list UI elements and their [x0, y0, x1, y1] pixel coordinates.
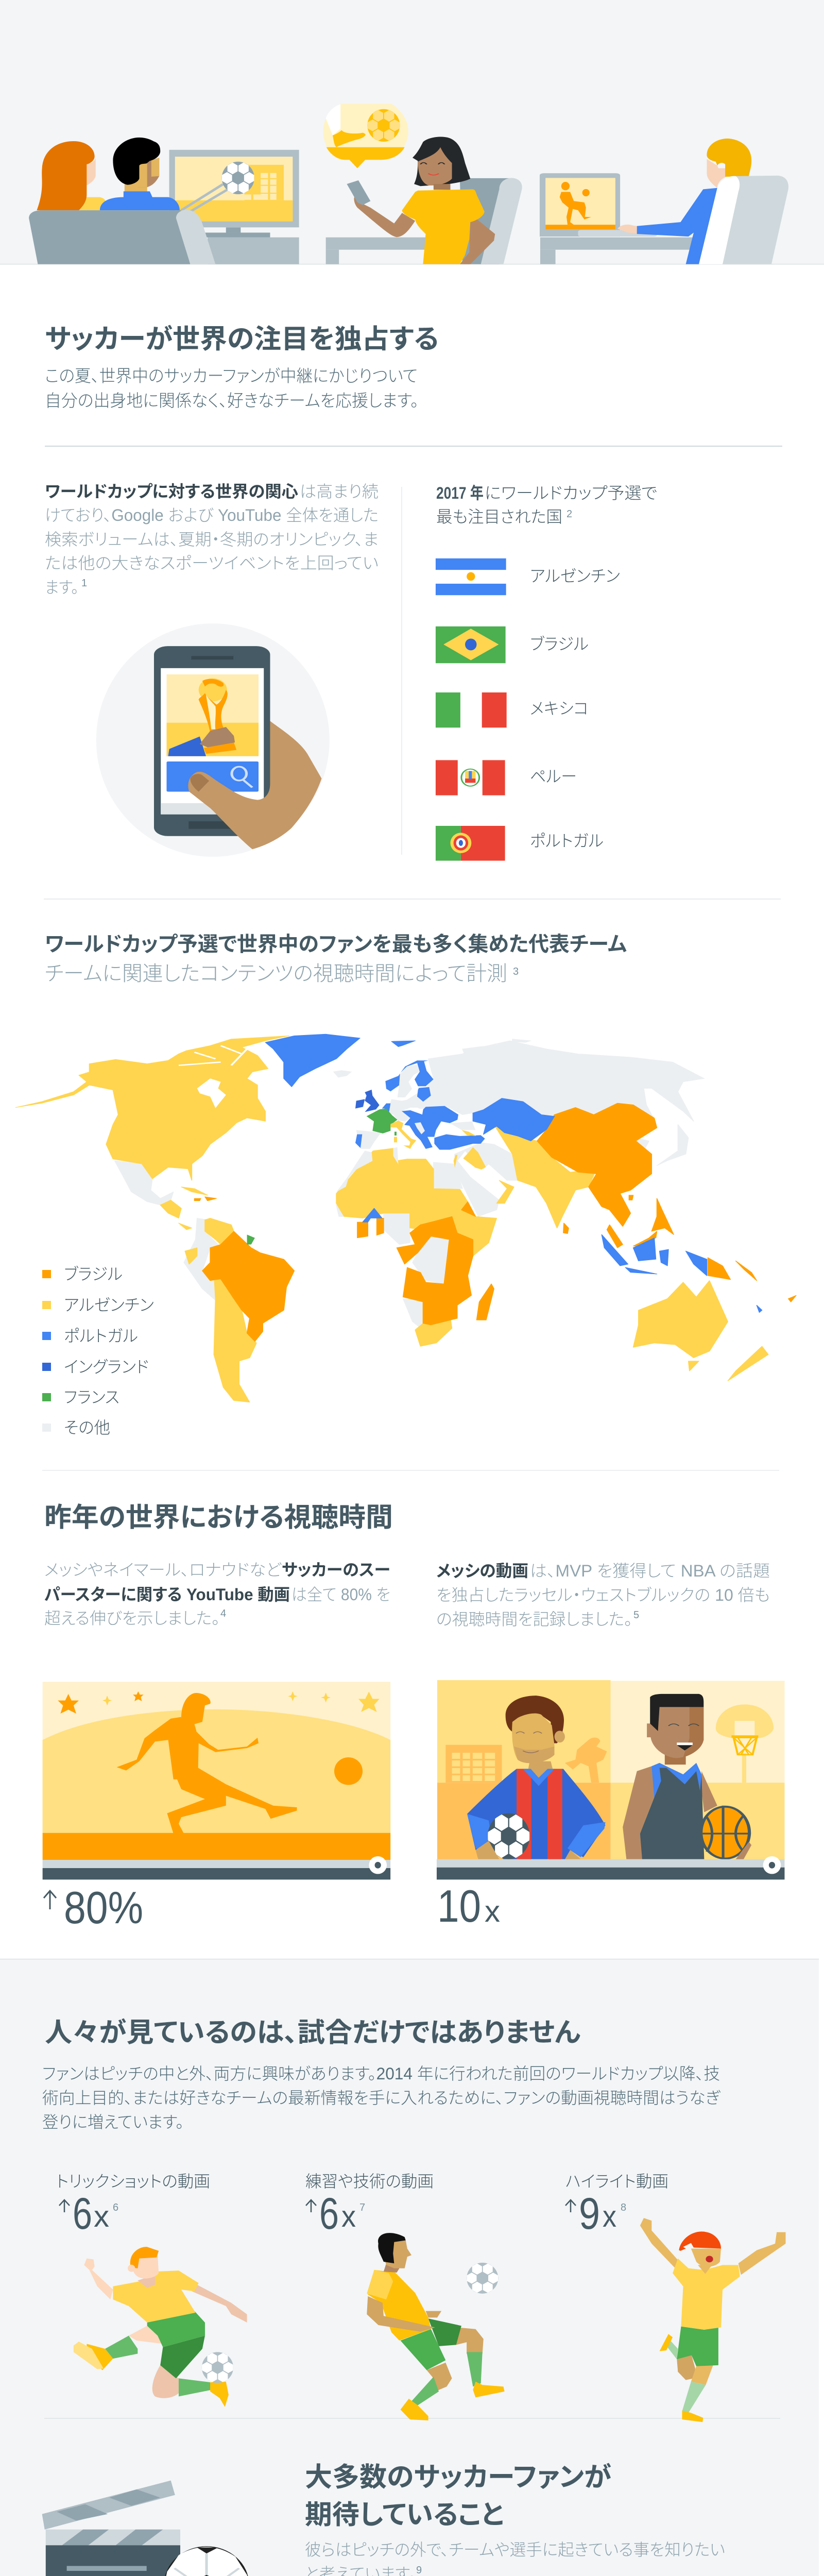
map legend: アルゼンチン [64, 1296, 154, 1314]
world map [16, 1034, 796, 1402]
player in basketball tank [623, 1694, 751, 1859]
stat: 10x: x [485, 1895, 500, 1928]
search interest text [45, 482, 379, 597]
player one kicking [74, 2247, 247, 2407]
map legend: その他 [64, 1418, 110, 1437]
region: other countries [114, 1039, 704, 1330]
heading: not only matches: 人々が見ているのは、試合だけではありません [45, 2018, 580, 2048]
text: what fans expect: 9 [416, 2565, 422, 2576]
label: Brazil: ブラジル [530, 635, 589, 653]
flag: Brazil [436, 626, 506, 663]
player three cheering [640, 2218, 785, 2422]
heading: most searched countries: 2 [566, 509, 572, 520]
flag: Peru [436, 760, 505, 795]
map legend: イングランド [64, 1358, 149, 1376]
text: superstars: メッシやネイマール、ロナウドなど [44, 1561, 282, 1579]
region: French Guiana [247, 1234, 255, 1244]
label: Mexico: メキシコ [530, 699, 589, 718]
stat: highlights 9x: x [603, 2200, 616, 2233]
intro text: 自分の出身地に関係なく、好きなチームを応援します。 [45, 391, 419, 410]
text: what fans expect: 彼らはピッチの外で、チームや選手に起きている事を知りたい [305, 2540, 725, 2559]
stat: trick shots 6x: 6 [73, 2189, 92, 2239]
illustration: soccer player silhouette video [43, 1682, 390, 1879]
text: Messi: の視聴時間を記録しました。 [436, 1610, 632, 1629]
woman with phone [326, 137, 522, 264]
flag: Portugal [436, 826, 505, 861]
search interest text: 検索ボリュームは、夏期・冬期のオリンピック、ま [45, 530, 379, 549]
map legend: フランス [64, 1388, 119, 1406]
heading: most searched countries: 2017 年 [436, 484, 484, 502]
stat: practice 6x: 練習や技術の動画 [305, 2172, 434, 2191]
text: superstars: サッカーのスー [282, 1561, 390, 1579]
player two juggling [367, 2233, 505, 2420]
label: Argentina: アルゼンチン [530, 567, 620, 585]
illustration: Messi and Westbrook video [437, 1680, 784, 1879]
heading: most searched countries [436, 484, 657, 526]
search interest text: は高まり続 [300, 482, 379, 501]
icon: clapperboard and ball [34, 2481, 254, 2576]
text: Messi: は、MVP を獲得して NBA の話題 [530, 1562, 770, 1580]
label: Portugal: ポルトガル [530, 832, 604, 850]
heading: most searched countries: 最も注目された国 [436, 507, 562, 526]
stat: up 80%: 80% [64, 1882, 143, 1933]
text: Messi: メッシの動画 [436, 1562, 528, 1580]
heading: viewing time: 昨年の世界における視聴時間 [44, 1503, 393, 1533]
text: fans interest: 術向上目的、または好きなチームの最新情報を手に入れるために、ファンの動画視聴時間はうなぎ [42, 2089, 721, 2107]
flag: Mexico [436, 692, 507, 727]
stat: trick shots 6x: 6 [113, 2202, 118, 2213]
stat: practice 6x: x [341, 2200, 356, 2233]
player in soccer jersey [467, 1696, 606, 1859]
stat: practice 6x: 6 [319, 2189, 339, 2239]
heading: what fans expect [305, 2463, 611, 2530]
man at laptop [540, 139, 788, 264]
stat: practice 6x [305, 2172, 434, 2239]
intro text: この夏、世界中のサッカーファンが中継にかじりついて [45, 366, 418, 385]
stat: highlights 9x: 8 [621, 2202, 626, 2213]
title: サッカーが世界の注目を独占する [45, 325, 439, 354]
woman and man seen from behind [29, 138, 215, 264]
speech bubble with ball [323, 104, 408, 168]
stat: trick shots 6x [56, 2172, 210, 2239]
map heading: 3 [513, 966, 519, 977]
text: fans interest: 登りに増えています。 [42, 2113, 184, 2131]
map legend: ポルトガル [64, 1327, 138, 1345]
text: superstars: パースターに関する YouTube 動画 [44, 1585, 290, 1604]
text: Messi: を独占したラッセル・ウェストブルックの 10 倍も [436, 1586, 770, 1604]
text: Messi [436, 1562, 770, 1629]
heading: most searched countries: にワールドカップ予選で [485, 484, 657, 502]
text: fans interest: ファンはピッチの中と外、両方に興味があります。2014 年に行われた前回のワールドカップ以降、技 [42, 2064, 720, 2083]
text: superstars: 超える伸びを示しました。 [44, 1609, 220, 1628]
search interest text: 1 [81, 578, 87, 589]
map heading [45, 933, 627, 985]
text: Messi: 5 [633, 1609, 639, 1621]
heading: what fans expect: 期待していること [305, 2500, 504, 2530]
flag: Argentina [436, 558, 506, 595]
region: Portugal [265, 1034, 762, 1313]
stat: highlights 9x [565, 2172, 668, 2239]
map heading: ワールドカップ予選で世界中のファンを最も多く集めた代表チーム [45, 933, 627, 956]
search interest text: ます。 [45, 578, 79, 597]
region: Europe and Middle East [333, 1060, 486, 1192]
text: superstars: は全て 80% を [291, 1585, 390, 1604]
search interest text: たは他の大きなスポーツイベントを上回ってい [45, 554, 379, 572]
monitor with ball [169, 150, 299, 264]
label: Peru: ペルー [530, 767, 577, 786]
stat: highlights 9x: ハイライト動画 [565, 2172, 668, 2191]
stat: trick shots 6x: x [94, 2200, 109, 2233]
hero illustration [0, 0, 824, 265]
text: superstars: 4 [220, 1608, 226, 1619]
stat: 10x: 10 [437, 1880, 481, 1931]
stat: highlights 9x: 9 [579, 2189, 600, 2239]
intro text [45, 366, 419, 410]
map legend [42, 1265, 154, 1437]
search interest text: けており、Google および YouTube 全体を通した [45, 506, 379, 524]
stat: practice 6x: 7 [359, 2202, 365, 2213]
icon: phone with trophy in hand [96, 623, 330, 857]
text: what fans expect [305, 2540, 725, 2576]
map legend: ブラジル [64, 1265, 123, 1283]
region: Brazil [195, 1103, 796, 1342]
panel: not only matches [0, 1959, 824, 2576]
text: superstars [44, 1561, 390, 1628]
text: fans interest [42, 2064, 721, 2131]
search interest text: ワールドカップに対する世界の関心 [45, 482, 298, 501]
heading: what fans expect: 大多数のサッカーファンが [305, 2463, 611, 2493]
map heading: チームに関連したコンテンツの視聴時間によって計測 [45, 962, 507, 985]
region: Argentina [16, 1036, 768, 1402]
stat: trick shots 6x: トリックショットの動画 [56, 2172, 210, 2191]
